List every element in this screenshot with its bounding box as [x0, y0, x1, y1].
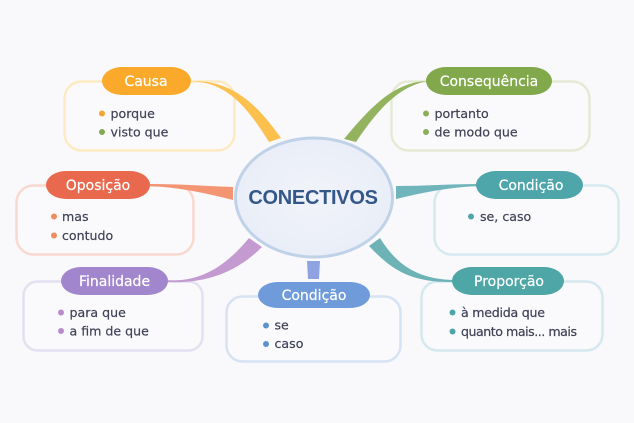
- panel: Consequência: [344, 67, 590, 150]
- connector: Finalidade: [166, 238, 262, 282]
- label: Condição (direita): [476, 171, 583, 199]
- list: Proporção: à medida que: [461, 305, 545, 320]
- label: Consequência: Consequência: [440, 74, 538, 90]
- list: Causa: visto que: [110, 124, 169, 140]
- label: Condição (inferior): Condição: [282, 288, 346, 304]
- connector: Condição (inferior): [307, 261, 320, 279]
- list: Causa: [99, 106, 169, 140]
- label: Causa: [102, 67, 191, 95]
- list: Consequência: [423, 106, 518, 140]
- list: Proporção: quanto mais... mais: [461, 324, 577, 339]
- connector: Causa: [190, 81, 281, 142]
- label: Causa: Causa: [124, 74, 168, 90]
- list: Condição (inferior): [263, 318, 304, 351]
- label: Finalidade: Finalidade: [79, 274, 150, 290]
- list: Finalidade: [58, 305, 149, 338]
- label: Finalidade: [61, 267, 168, 295]
- list: Causa: porque: [110, 106, 155, 121]
- list: Oposição: contudo: [62, 228, 114, 243]
- connector: Condição (direita): [396, 184, 480, 199]
- central node: CONECTIVOS: [236, 138, 392, 257]
- connector: Oposição: [148, 184, 233, 200]
- panel: Condição (inferior): [226, 261, 400, 362]
- central node: CONECTIVOS: CONECTIVOS: [248, 187, 378, 209]
- panel: Causa: [64, 67, 281, 150]
- list: Condição (inferior): se: [274, 318, 289, 332]
- list: Proporção: [450, 305, 577, 339]
- panel: Condição (direita): [396, 171, 618, 254]
- connector: Proporção: [369, 238, 456, 282]
- panel: Finalidade: [24, 238, 262, 350]
- list: Consequência: portanto: [434, 106, 489, 121]
- panel: Proporção: [369, 238, 602, 350]
- list: Oposição: mas: [62, 209, 89, 224]
- list: Condição (inferior): caso: [274, 336, 304, 351]
- label: Proporção: [452, 267, 564, 295]
- list: Finalidade: para que: [70, 305, 126, 320]
- label: Oposição: Oposição: [66, 178, 130, 194]
- list: Oposição: [51, 209, 114, 243]
- label: Condição (direita): Condição: [499, 178, 563, 194]
- label: Consequência: [426, 67, 552, 95]
- list: Finalidade: a fim de que: [70, 324, 149, 338]
- label: Proporção: Proporção: [474, 274, 544, 290]
- label: Oposição: [46, 171, 150, 199]
- list: Consequência: de modo que: [434, 124, 518, 140]
- list: Condição (direita): se, caso: [480, 209, 532, 224]
- panel: Oposição: [16, 171, 233, 254]
- label: Condição (inferior): [258, 282, 370, 308]
- connector: Consequência: [344, 81, 428, 142]
